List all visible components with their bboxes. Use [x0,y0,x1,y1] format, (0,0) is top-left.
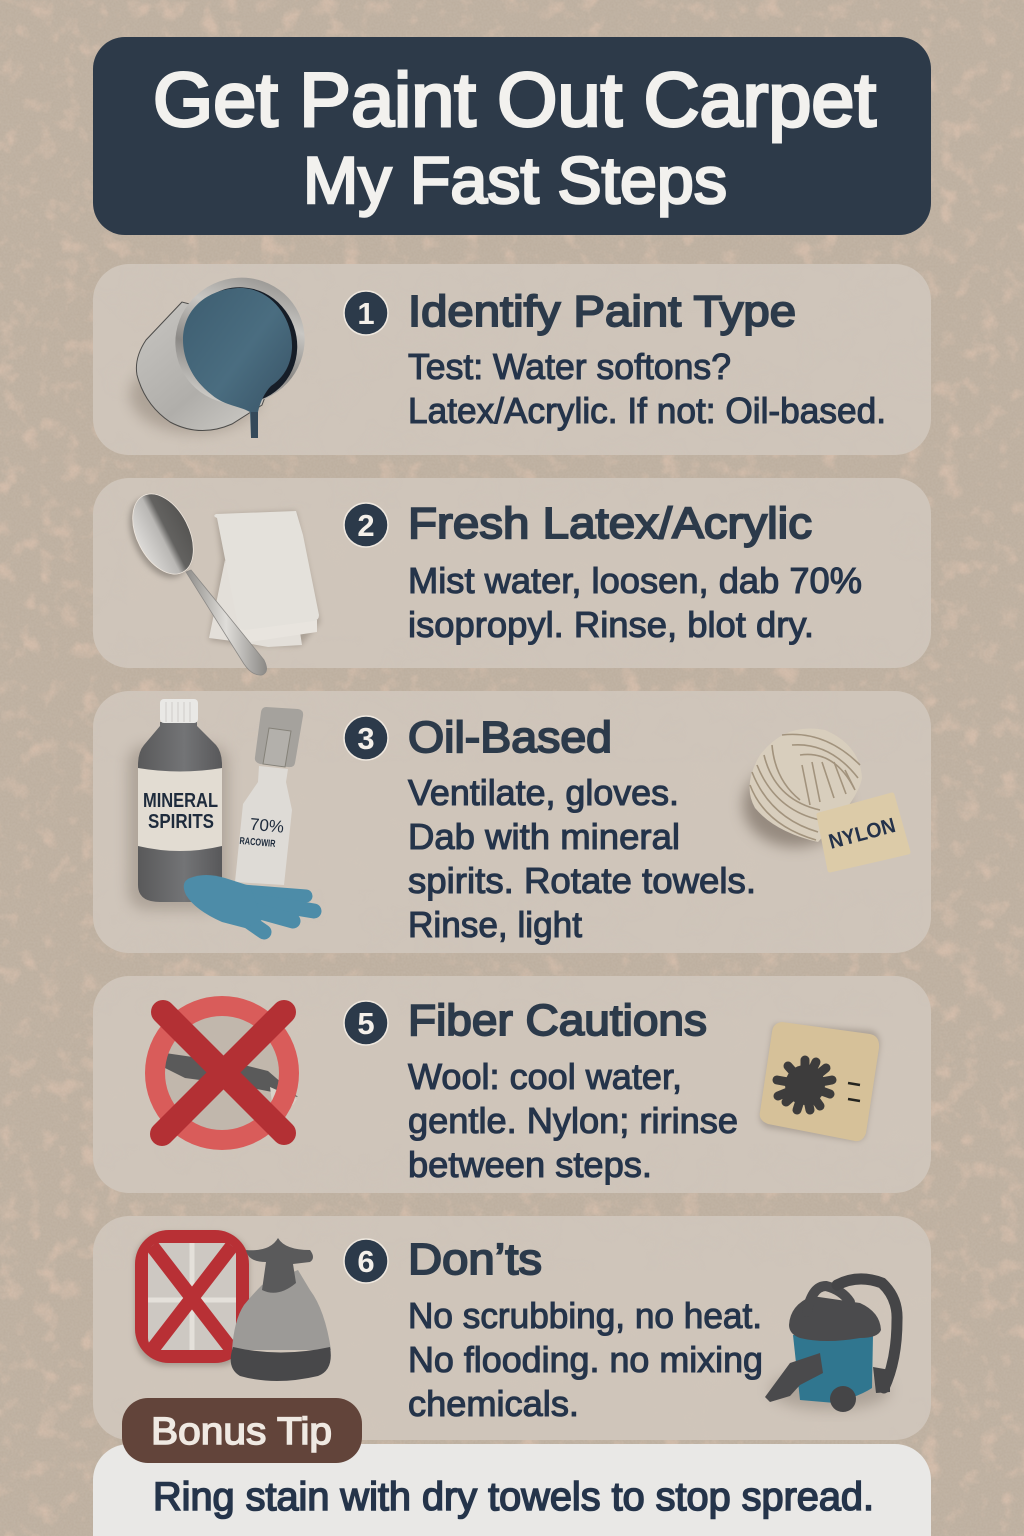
icon: fabric swatch with burn mark [760,1022,880,1141]
icon: mineral spirits bottle, spray bottle and glove [128,699,314,932]
body text: Mist water, loosen, dab 70% [408,560,862,601]
bonus tip badge: Bonus Tip [151,1411,332,1453]
body text: Rinse, light [408,904,582,945]
heading: Fiber Cautions [408,996,707,1045]
icon: tipped paint can [130,256,326,438]
body text: Wool: cool water, [408,1056,682,1097]
body text [408,772,756,945]
step number 6 [344,1239,388,1283]
step number 3: 3 [357,721,375,756]
body text: isopropyl. Rinse, blot dry. [408,604,814,645]
body text: Ventilate, gloves. [408,772,679,813]
icon: spoon and towel [117,484,320,675]
title line 1: Get Paint Out Carpet [153,58,876,143]
step number 5: 5 [357,1006,375,1041]
panel: bonus tip [93,1398,931,1536]
body text: No scrubbing, no heat. [408,1295,762,1336]
step number 1: 1 [357,296,375,331]
title line 2: My Fast Steps [303,143,727,217]
heading: Identify Paint Type [408,287,796,336]
icon: mineral spirits bottle, spray bottle and glove: RACOWIR [239,836,276,850]
icon: prohibited brush [155,1006,298,1140]
step number 2: 2 [357,508,375,543]
heading: Fresh Latex/Acrylic [408,499,812,548]
body text [408,1295,763,1424]
icon: mineral spirits bottle, spray bottle and glove: SPIRITS [148,811,214,833]
icon: mineral spirits bottle, spray bottle and glove: MINERAL [143,790,218,812]
body text: between steps. [408,1144,652,1185]
icon: crossed-out window and heat bag [135,1230,331,1381]
body text: Test: Water softons? [408,346,731,387]
heading: Don’ts [408,1235,542,1284]
icon: nylon yarn ball with tag [743,728,908,870]
panel: step 5 fiber cautions [93,976,931,1193]
panel: step 2 fresh latex/acrylic [93,478,931,675]
icon: wet-dry vacuum [765,1279,897,1412]
panel: step 3 oil-based [93,691,931,953]
icon: nylon yarn ball with tag: NYLON [826,814,898,854]
body text [408,1056,738,1185]
body text [408,346,886,431]
step number 1 [344,291,388,335]
step number 2 [344,503,388,547]
body text: gentle. Nylon; ririnse [408,1100,738,1141]
panel: step 6 don'ts [93,1216,931,1440]
body text: Dab with mineral [408,816,680,857]
step number 5 [344,1001,388,1045]
body text [408,560,862,645]
body text: chemicals. [408,1383,579,1424]
body text: spirits. Rotate towels. [408,860,756,901]
bonus tip badge [122,1398,362,1463]
icon: mineral spirits bottle, spray bottle and glove: 70% [249,815,285,837]
bonus tip text: Ring stain with dry towels to stop spread. [153,1475,874,1519]
body text: Latex/Acrylic. If not: Oil-based. [408,390,886,431]
panel: step 1 identify paint type [93,256,931,455]
heading: Oil-Based [408,713,612,762]
title banner [93,37,931,235]
step number 6: 6 [357,1244,375,1279]
step number 3 [344,716,388,760]
body text: No flooding. no mixing [408,1339,763,1380]
